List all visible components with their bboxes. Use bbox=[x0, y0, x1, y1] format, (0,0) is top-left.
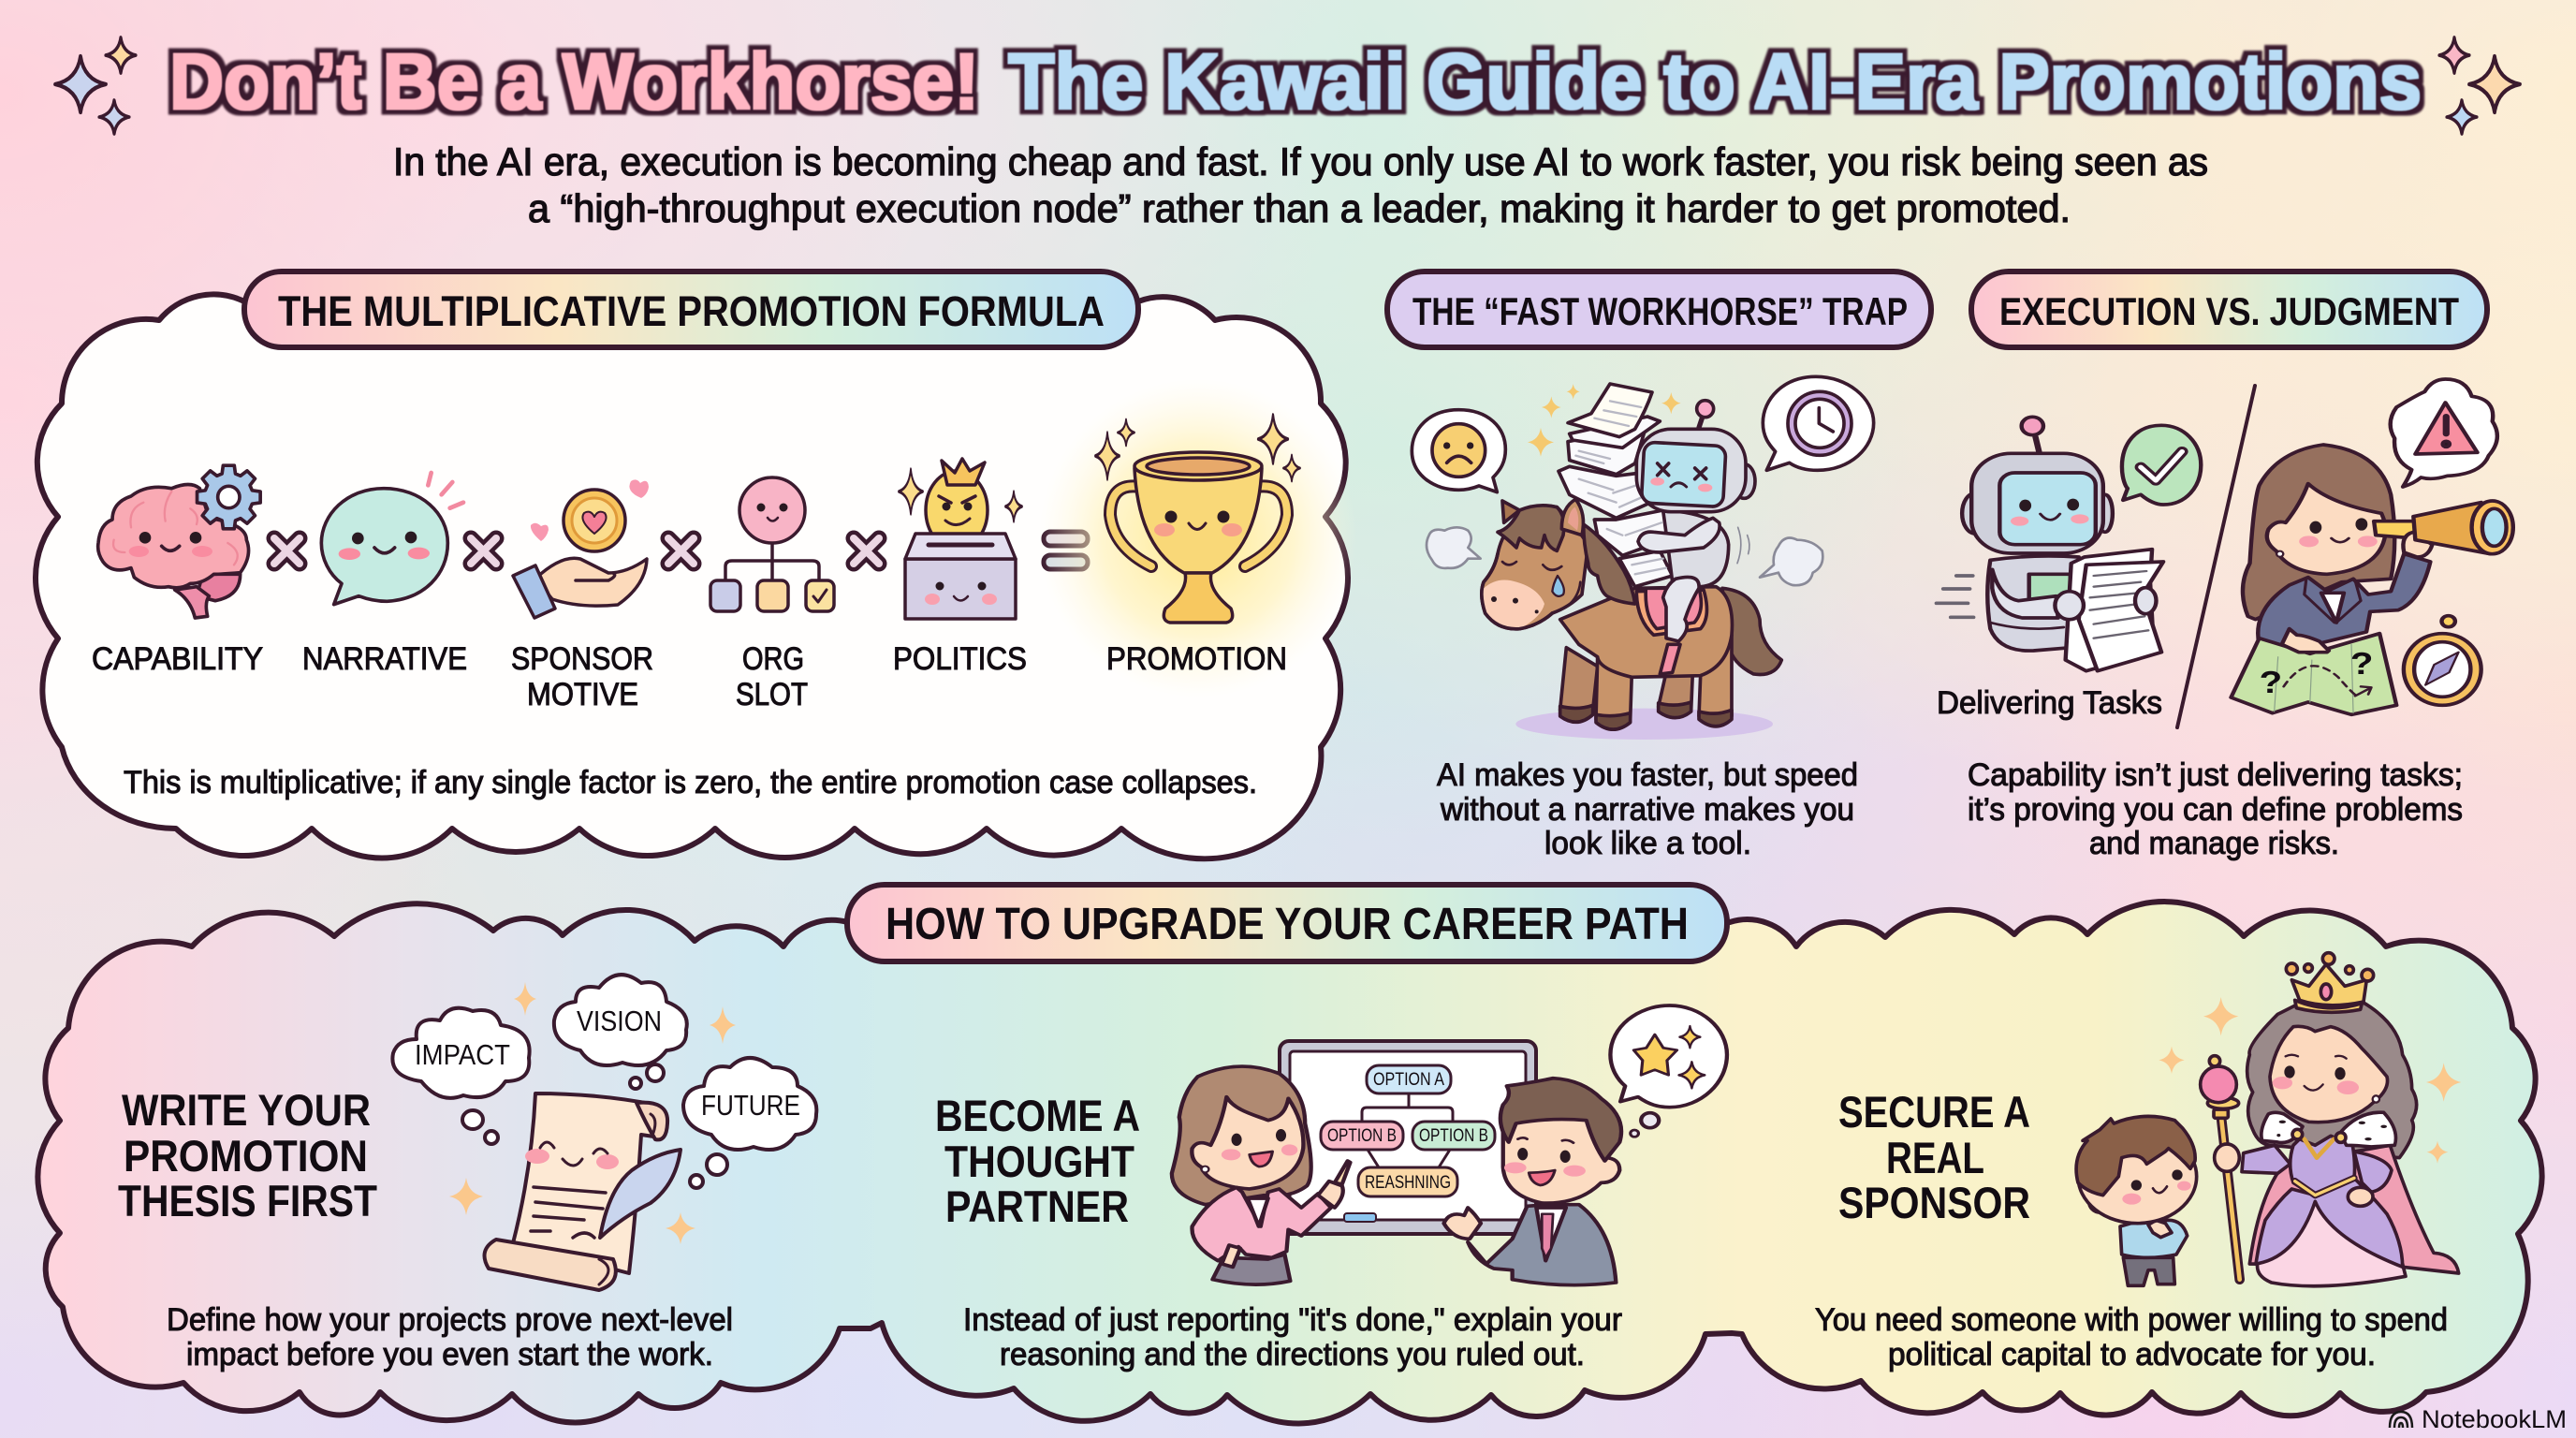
scroll bbox=[485, 1093, 681, 1290]
whiteboard bbox=[1280, 1041, 1536, 1234]
whiteboard: OPTION B bbox=[1419, 1126, 1488, 1146]
trap caption: look like a tool. bbox=[1544, 826, 1751, 861]
icon: speech bubble bbox=[321, 473, 463, 605]
formula labels: POLITICS bbox=[893, 641, 1027, 677]
illustration: scroll and thought clouds bbox=[392, 975, 816, 1290]
subtitle: In the AI era, execution is becoming cheap and fast. If you only use AI to work faster, you risk being seen as bbox=[393, 139, 2208, 183]
map: ? bbox=[2350, 646, 2373, 681]
formula labels: SLOT bbox=[736, 677, 808, 712]
presenters bbox=[1172, 1005, 1727, 1285]
multiply sign bbox=[471, 538, 496, 564]
judgment caption: Capability isn’t just delivering tasks; bbox=[1968, 757, 2463, 793]
subtitle: a “high-throughput execution node” rather than a leader, making it harder to get promoted. bbox=[528, 186, 2071, 230]
step 2 heading bbox=[935, 1091, 1140, 1231]
divider line between execution and judgment bbox=[2177, 386, 2255, 727]
whiteboard: OPTION A bbox=[1373, 1070, 1444, 1090]
check bubble bbox=[2122, 425, 2201, 505]
step 3 heading: REAL bbox=[1886, 1133, 1984, 1182]
judgment heading pill bbox=[1971, 271, 2487, 347]
multiply sign bbox=[274, 538, 300, 564]
robot rider bbox=[1636, 401, 1755, 641]
title: Don’t Be a Workhorse! bbox=[169, 37, 979, 125]
step 3 heading bbox=[1838, 1087, 2030, 1227]
illustration: whiteboard discussion bbox=[1172, 1005, 1727, 1285]
panel: multiplicative formula bbox=[36, 271, 1357, 858]
step 3 text bbox=[1815, 1302, 2448, 1372]
cloud future bbox=[683, 1058, 816, 1150]
icon: brain bbox=[98, 465, 260, 618]
career heading pill: HOW TO UPGRADE YOUR CAREER PATH bbox=[886, 900, 1689, 949]
formula labels: CAPABILITY bbox=[92, 641, 263, 677]
sad bubble bbox=[1412, 410, 1505, 492]
formula note: This is multiplicative; if any single factor is zero, the entire promotion case collapses. bbox=[124, 765, 1257, 800]
paper stack bbox=[1559, 384, 1673, 587]
judgment caption: and manage risks. bbox=[2089, 826, 2339, 861]
sparkles: title left bbox=[55, 37, 136, 134]
icon: coin and hand bbox=[513, 479, 649, 618]
title bbox=[169, 37, 2422, 125]
step 1 heading: WRITE YOUR bbox=[122, 1085, 371, 1135]
map bbox=[2231, 629, 2396, 714]
multiply sign bbox=[854, 538, 879, 564]
formula heading pill: THE MULTIPLICATIVE PROMOTION FORMULA bbox=[278, 287, 1105, 335]
panel: execution vs judgment bbox=[1937, 271, 2513, 861]
tail bbox=[1722, 588, 1781, 675]
formula heading pill bbox=[244, 271, 1138, 347]
multiply sign bbox=[668, 538, 694, 564]
judgment caption bbox=[1968, 757, 2463, 861]
formula labels: NARRATIVE bbox=[302, 641, 467, 677]
illustration: woman with telescope bbox=[2231, 379, 2513, 714]
formula labels: PROMOTION bbox=[1106, 641, 1287, 677]
formula labels bbox=[92, 641, 1287, 712]
career heading pill bbox=[847, 885, 1727, 961]
step 1 heading bbox=[118, 1085, 377, 1225]
saddle bbox=[1636, 588, 1706, 674]
icon: org chart bbox=[710, 477, 834, 611]
clock bubble bbox=[1763, 376, 1874, 470]
illustration: robot riding a horse bbox=[1412, 376, 1874, 740]
panel: fast workhorse trap bbox=[1387, 271, 1931, 861]
steam puffs bbox=[1427, 527, 1822, 585]
formula labels: MOTIVE bbox=[527, 677, 638, 712]
icon: trophy bbox=[1039, 379, 1357, 697]
horse head bbox=[1482, 499, 1635, 629]
step 1 heading: THESIS FIRST bbox=[118, 1176, 377, 1225]
watermark: NotebookLM bbox=[2422, 1405, 2567, 1433]
compass bbox=[2404, 616, 2481, 705]
woman presenter bbox=[1172, 1066, 1350, 1284]
step 1 heading: PROMOTION bbox=[124, 1131, 368, 1181]
trap heading pill: THE “FAST WORKHORSE” TRAP bbox=[1412, 289, 1908, 333]
trap caption bbox=[1437, 757, 1858, 861]
gown bbox=[2258, 1201, 2406, 1286]
step 1 text: impact before you even start the work. bbox=[186, 1337, 713, 1372]
scepter bbox=[2221, 1121, 2240, 1280]
label: delivering tasks: Delivering Tasks bbox=[1937, 685, 2162, 721]
step 3 text: political capital to advocate for you. bbox=[1888, 1337, 2376, 1372]
cloud impact: IMPACT bbox=[415, 1038, 510, 1071]
subtitle bbox=[393, 139, 2208, 230]
queen bbox=[2201, 953, 2459, 1286]
trap heading pill bbox=[1387, 271, 1931, 347]
formula labels: SPONSOR bbox=[511, 641, 653, 677]
step 3 text: You need someone with power willing to spend bbox=[1815, 1302, 2448, 1338]
sparkles: title right bbox=[2439, 37, 2520, 134]
whiteboard: OPTION B bbox=[1327, 1126, 1397, 1146]
step 2 text: Instead of just reporting "it's done," explain your bbox=[963, 1302, 1622, 1338]
sparkles bbox=[1528, 384, 1681, 457]
cape bbox=[2249, 1145, 2459, 1273]
warning bubble bbox=[2391, 379, 2497, 487]
step 3 heading: SECURE A bbox=[1838, 1087, 2030, 1137]
step 2 text: reasoning and the directions you ruled out. bbox=[1000, 1337, 1585, 1372]
step 1 text bbox=[167, 1302, 733, 1372]
horse body bbox=[1560, 587, 1732, 677]
cloud impact bbox=[392, 1008, 530, 1098]
horse legs bbox=[1560, 635, 1732, 729]
judgment heading pill: EXECUTION VS. JUDGMENT bbox=[1999, 289, 2459, 333]
step 2 text bbox=[963, 1302, 1622, 1372]
child bbox=[2076, 1116, 2197, 1285]
illustration: robot delivering tasks bbox=[1937, 417, 2201, 671]
trap caption: AI makes you faster, but speed bbox=[1437, 757, 1858, 793]
whiteboard: REASHNING bbox=[1365, 1173, 1451, 1193]
star thought bubble bbox=[1610, 1005, 1727, 1137]
icon: notebooklm mark bbox=[2390, 1412, 2412, 1428]
illustration: queen sponsor and child bbox=[2076, 953, 2461, 1286]
step 2 heading: THOUGHT bbox=[944, 1137, 1134, 1186]
equals sign bbox=[1044, 532, 1088, 569]
step 2 heading: PARTNER bbox=[945, 1181, 1129, 1231]
step 3 heading: SPONSOR bbox=[1838, 1178, 2030, 1227]
ermine collar bbox=[2261, 1112, 2303, 1142]
man colleague bbox=[1443, 1078, 1621, 1285]
crown bbox=[2291, 964, 2366, 1005]
cloud vision: VISION bbox=[577, 1005, 662, 1037]
cloud vision bbox=[554, 975, 687, 1065]
panel: career path upgrades bbox=[37, 885, 2542, 1423]
trap caption: without a narrative makes you bbox=[1440, 792, 1854, 828]
cloud future: FUTURE bbox=[701, 1089, 800, 1122]
title: The Kawaii Guide to AI-Era Promotions bbox=[1008, 37, 2422, 125]
map: ? bbox=[2260, 665, 2282, 699]
step 1 text: Define how your projects prove next-level bbox=[167, 1302, 733, 1338]
judgment caption: it’s proving you can define problems bbox=[1968, 792, 2463, 828]
step 2 heading: BECOME A bbox=[935, 1091, 1140, 1140]
formula labels: ORG bbox=[742, 641, 804, 677]
icon: politics ballot box bbox=[899, 459, 1022, 619]
